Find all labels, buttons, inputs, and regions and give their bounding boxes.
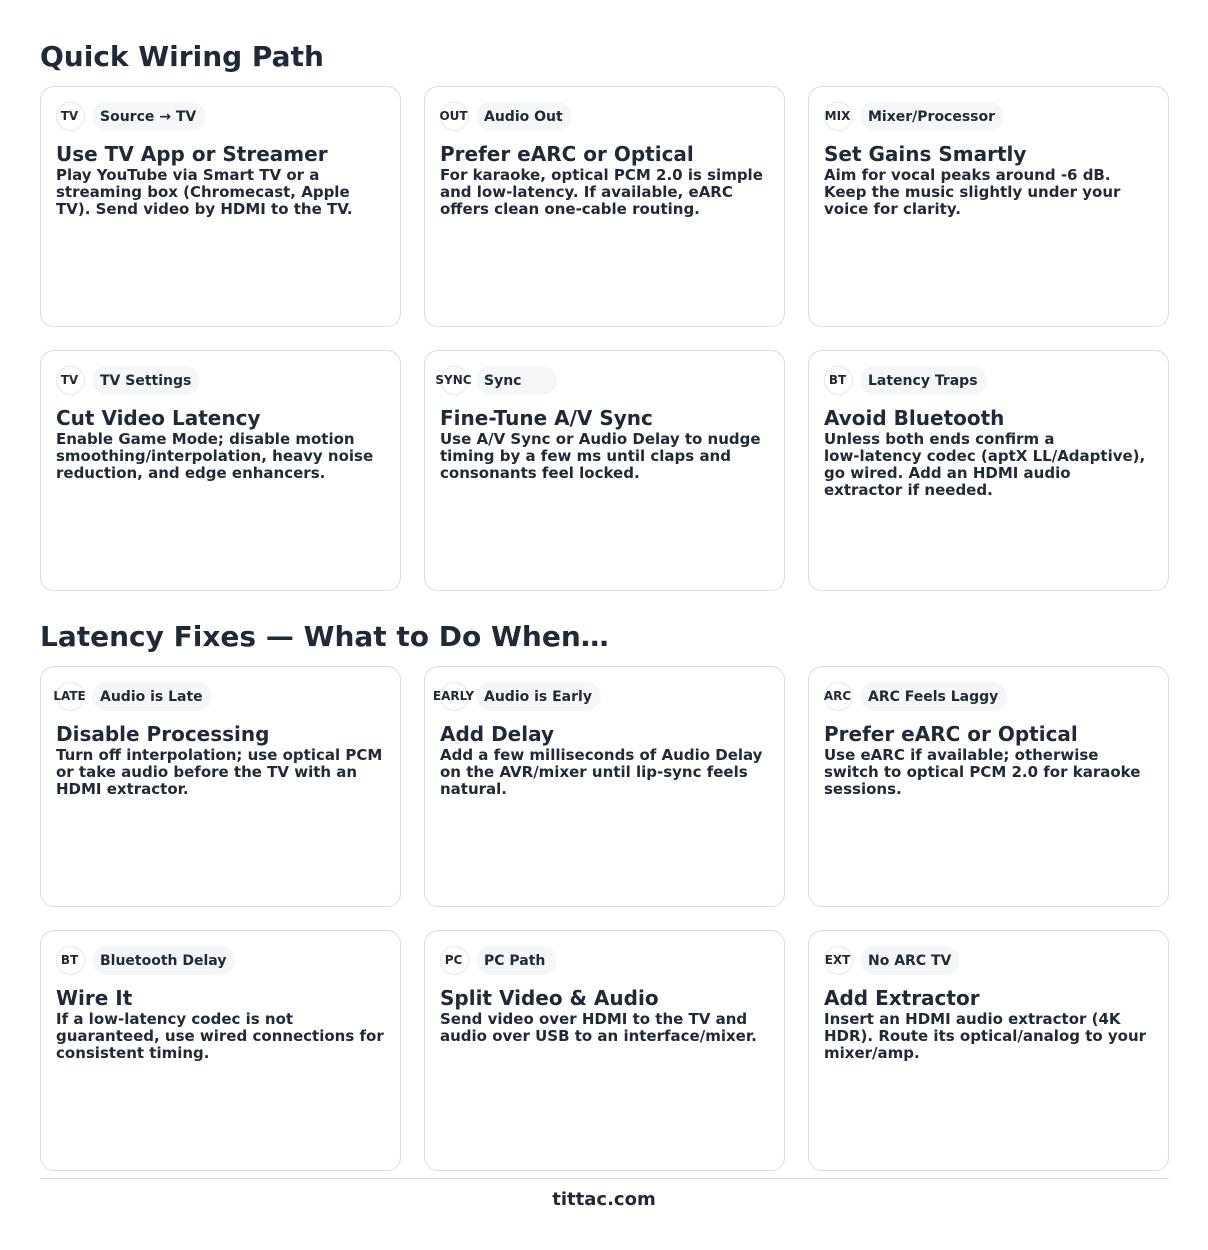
card text: If a low-latency codec is not xyxy=(56,1010,293,1028)
chip: Latency Traps: Latency Traps xyxy=(868,373,978,389)
card text xyxy=(824,430,1145,499)
card text: mixer/amp. xyxy=(824,1044,920,1062)
card text xyxy=(56,166,353,218)
icon badge: PC: PC xyxy=(445,952,462,966)
card title: Fine-Tune A/V Sync xyxy=(440,406,653,430)
card text: timing by a few ms until claps and xyxy=(440,447,731,465)
chip: Source to TV: Source → TV xyxy=(100,109,196,125)
chip: TV Settings xyxy=(92,366,200,395)
card text: streaming box (Chromecast, Apple xyxy=(56,183,350,201)
card text: Aim for vocal peaks around -6 dB. xyxy=(824,166,1111,184)
card title: Disable Processing xyxy=(56,722,269,746)
panel: Audio Out xyxy=(424,86,785,327)
icon badge: MIX xyxy=(824,102,853,131)
card text xyxy=(56,430,373,482)
card title: Set Gains Smartly xyxy=(824,142,1026,166)
card text: on the AVR/mixer until lip-sync feels xyxy=(440,763,748,781)
card text: audio over USB to an interface/mixer. xyxy=(440,1027,757,1045)
card title: Prefer eARC or Optical xyxy=(824,722,1078,746)
chip: No ARC TV: No ARC TV xyxy=(868,953,951,969)
chip: Audio Out: Audio Out xyxy=(484,109,563,125)
heading: Quick Wiring Path: Quick Wiring Path xyxy=(40,40,324,73)
chip: TV Settings: TV Settings xyxy=(100,373,191,389)
icon badge: PC xyxy=(440,946,469,975)
chip: PC Path xyxy=(476,946,557,975)
panel: No ARC TV xyxy=(808,930,1169,1171)
card text: sessions. xyxy=(824,780,902,798)
icon badge: BT xyxy=(824,366,853,395)
card text: Use A/V Sync or Audio Delay to nudge xyxy=(440,430,761,448)
card text: voice for clarity. xyxy=(824,200,961,218)
card text xyxy=(56,1010,384,1062)
card text: reduction, and edge enhancers. xyxy=(56,464,325,482)
icon badge: ARC: ARC xyxy=(824,688,851,702)
icon badge: MIX: MIX xyxy=(825,108,850,122)
icon badge: SYNC: SYNC xyxy=(435,372,472,386)
card text: HDR). Route its optical/analog to your xyxy=(824,1027,1146,1045)
card text: or take audio before the TV with an xyxy=(56,763,357,781)
card text xyxy=(824,1010,1146,1062)
icon badge: BT: BT xyxy=(61,952,78,966)
card title: Wire It xyxy=(56,986,132,1010)
chip: Bluetooth Delay: Bluetooth Delay xyxy=(100,953,226,969)
panel: Sync xyxy=(424,350,785,591)
card text: low-latency codec (aptX LL/Adaptive), xyxy=(824,447,1145,465)
card text: Use eARC if available; otherwise xyxy=(824,746,1098,764)
chip: Audio is Late xyxy=(92,682,212,711)
icon badge: TV xyxy=(56,102,85,131)
card text: guaranteed, use wired connections for xyxy=(56,1027,384,1045)
chip: ARC Feels Laggy: ARC Feels Laggy xyxy=(868,689,998,705)
card text: extractor if needed. xyxy=(824,481,993,499)
icon badge: TV: TV xyxy=(61,108,78,122)
card text xyxy=(56,746,382,798)
panel: Bluetooth Delay xyxy=(40,930,401,1171)
card text: natural. xyxy=(440,780,507,798)
icon badge: LATE: LATE xyxy=(53,688,86,702)
card text: Turn off interpolation; use optical PCM xyxy=(56,746,382,764)
icon badge: OUT: OUT xyxy=(439,108,468,122)
chip: PC Path: PC Path xyxy=(484,953,545,969)
icon badge: TV: TV xyxy=(61,372,78,386)
icon badge: BT xyxy=(56,946,85,975)
card text xyxy=(440,430,761,482)
card text: Add a few milliseconds of Audio Delay xyxy=(440,746,762,764)
card text: switch to optical PCM 2.0 for karaoke xyxy=(824,763,1140,781)
footer: site name: tittac.com xyxy=(552,1189,656,1210)
chip: Mixer/Processor xyxy=(860,102,1004,131)
panel: Latency Traps xyxy=(808,350,1169,591)
panel: Source to TV xyxy=(40,86,401,327)
card text: TV). Send video by HDMI to the TV. xyxy=(56,200,353,218)
chip: ARC Feels Laggy xyxy=(860,682,1007,711)
chip: Latency Traps xyxy=(860,366,987,395)
chip: Audio Out xyxy=(476,102,572,131)
panel: ARC Feels Laggy xyxy=(808,666,1169,907)
panel: Audio is Late xyxy=(40,666,401,907)
heading: Latency Fixes: Latency Fixes — What to Do When… xyxy=(40,620,609,653)
icon badge: BT: BT xyxy=(829,372,846,386)
card text: Keep the music slightly under your xyxy=(824,183,1120,201)
card title: Avoid Bluetooth xyxy=(824,406,1004,430)
card title: Use TV App or Streamer xyxy=(56,142,328,166)
card text: and low-latency. If available, eARC xyxy=(440,183,733,201)
card text xyxy=(440,166,763,218)
card text xyxy=(824,166,1120,218)
card text: Insert an HDMI audio extractor (4K xyxy=(824,1010,1121,1028)
icon badge: ARC xyxy=(824,682,853,711)
chip: Audio is Late: Audio is Late xyxy=(100,689,203,705)
card title: Add Delay xyxy=(440,722,554,746)
card text: Unless both ends confirm a xyxy=(824,430,1054,448)
card title: Add Extractor xyxy=(824,986,980,1010)
icon badge: EXT xyxy=(824,946,853,975)
chip: Audio is Early: Audio is Early xyxy=(484,689,592,705)
chip: No ARC TV xyxy=(860,946,960,975)
chip: Mixer/Processor: Mixer/Processor xyxy=(868,109,995,125)
card text: offers clean one-cable routing. xyxy=(440,200,700,218)
card text xyxy=(824,746,1140,798)
panel: Audio is Early xyxy=(424,666,785,907)
icon badge: TV xyxy=(56,366,85,395)
card text: consistent timing. xyxy=(56,1044,210,1062)
icon badge: EARLY: EARLY xyxy=(433,688,474,702)
panel: Mixer/Processor xyxy=(808,86,1169,327)
card text: Send video over HDMI to the TV and xyxy=(440,1010,747,1028)
card text xyxy=(440,1010,757,1045)
card text: Play YouTube via Smart TV or a xyxy=(56,166,319,184)
card text: HDMI extractor. xyxy=(56,780,189,798)
card text: Enable Game Mode; disable motion xyxy=(56,430,355,448)
card text: go wired. Add an HDMI audio xyxy=(824,464,1071,482)
chip: Audio is Early xyxy=(476,682,601,711)
card text: smoothing/interpolation, heavy noise xyxy=(56,447,373,465)
card text: consonants feel locked. xyxy=(440,464,640,482)
chip: Sync xyxy=(476,366,557,395)
panel: TV Settings xyxy=(40,350,401,591)
panel: PC Path xyxy=(424,930,785,1171)
icon badge: LATE xyxy=(56,682,85,711)
icon badge: EXT: EXT xyxy=(825,952,850,966)
card text xyxy=(440,746,762,798)
chip: Source to TV xyxy=(92,102,206,131)
card text: For karaoke, optical PCM 2.0 is simple xyxy=(440,166,763,184)
chip: Sync: Sync xyxy=(484,373,521,389)
card title: Split Video & Audio xyxy=(440,986,659,1010)
icon badge: SYNC xyxy=(440,366,469,395)
chip: Bluetooth Delay xyxy=(92,946,235,975)
card title: Prefer eARC or Optical xyxy=(440,142,694,166)
icon badge: EARLY xyxy=(440,682,469,711)
card title: Cut Video Latency xyxy=(56,406,261,430)
icon badge: OUT xyxy=(440,102,469,131)
